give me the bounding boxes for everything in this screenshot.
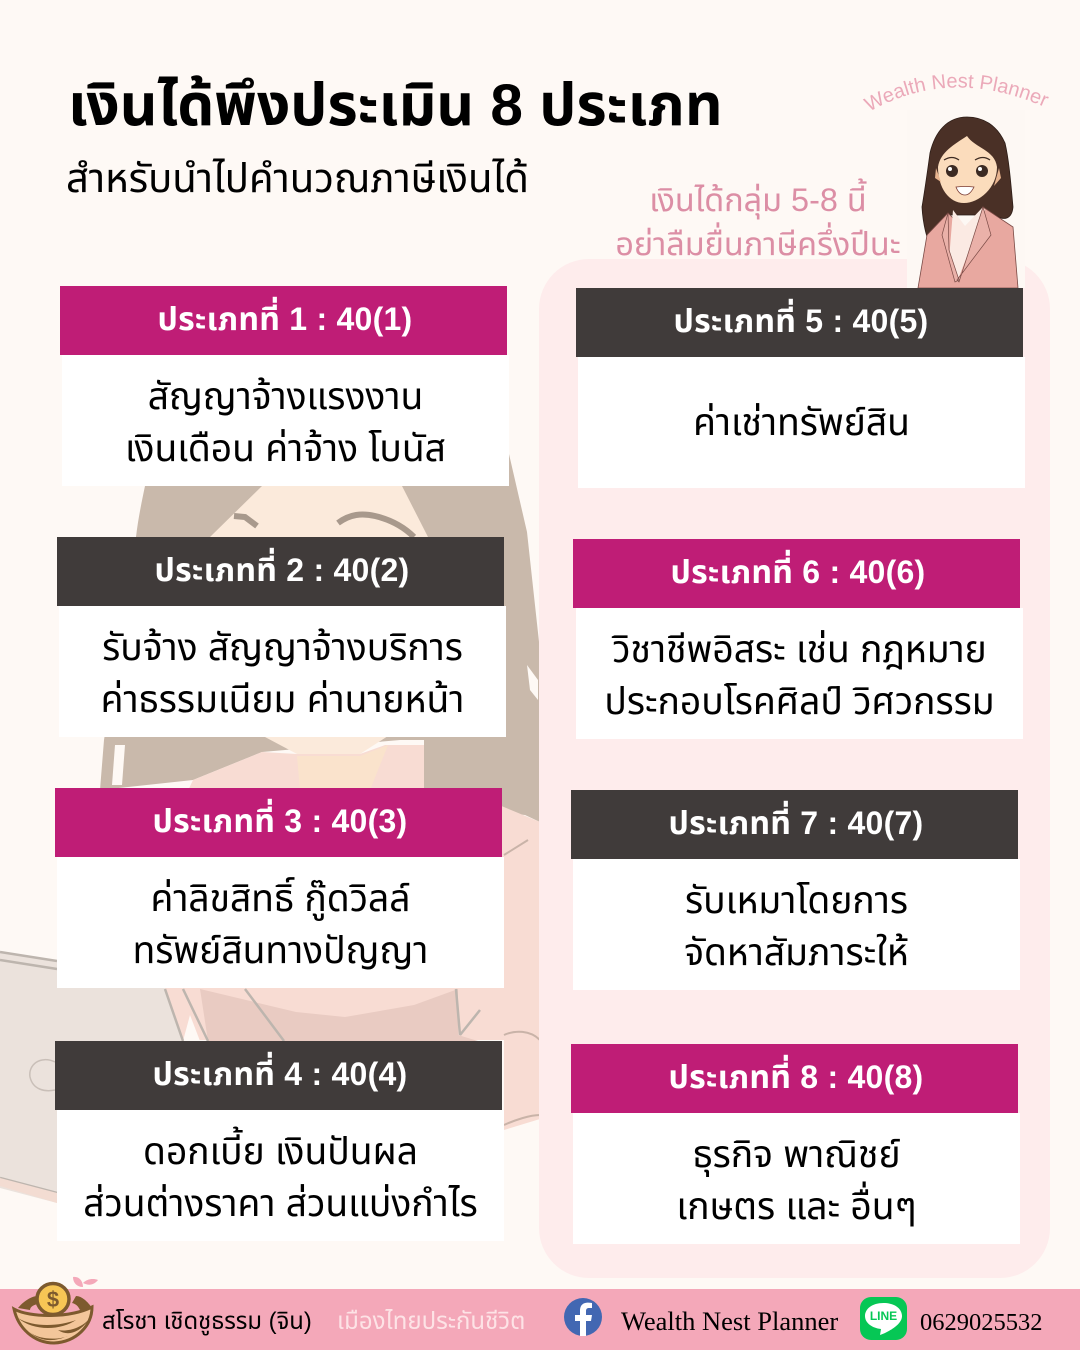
header bbox=[60, 286, 507, 355]
pink reminder note: อย่าลืมยื่นภาษีครึ่งปีนะ bbox=[615, 226, 901, 262]
pink reminder note: เงินได้กลุ่ม 5-8 นี้ bbox=[649, 182, 867, 218]
description: จัดหาสัมภาระให้ bbox=[684, 931, 909, 973]
curved brand label: Wealth Nest Planner bbox=[863, 74, 1049, 110]
contact name: สโรชา เชิดชูธรรม (จิน) bbox=[102, 1308, 312, 1335]
footer bar bbox=[0, 1289, 1080, 1350]
header bbox=[571, 1044, 1018, 1113]
pink reminder note bbox=[615, 178, 901, 262]
description: ประกอบโรคศิลป์ วิศวกรรม bbox=[604, 680, 995, 722]
header bbox=[573, 539, 1020, 608]
card: type 3 bbox=[55, 788, 504, 988]
description bbox=[57, 857, 504, 988]
phone number: 0629025532 bbox=[920, 1309, 1042, 1336]
description bbox=[578, 357, 1025, 488]
description: ค่าเช่าทรัพย์สิน bbox=[693, 401, 910, 443]
description bbox=[576, 608, 1023, 739]
background watermark: large illustrated woman bbox=[0, 454, 539, 1203]
description bbox=[59, 606, 506, 737]
right rounded panel bbox=[539, 259, 1050, 1278]
description: เงินเดือน ค่าจ้าง โบนัส bbox=[125, 427, 446, 469]
description bbox=[573, 859, 1020, 990]
description: ทรัพย์สินทางปัญญา bbox=[133, 929, 428, 971]
description bbox=[62, 355, 509, 486]
description bbox=[57, 1110, 504, 1241]
company name: เมืองไทยประกันชีวิต bbox=[337, 1308, 525, 1335]
icon: LINE: LINE bbox=[870, 1309, 897, 1323]
header bbox=[571, 790, 1018, 859]
card: type 8 bbox=[571, 1044, 1020, 1244]
header bbox=[55, 788, 502, 857]
description: ส่วนต่างราคา ส่วนแบ่งกำไร bbox=[83, 1182, 478, 1224]
header: ประเภทที่ 8 : 40(8) bbox=[669, 1059, 923, 1095]
icon: nest with coin logo: $ bbox=[47, 1287, 59, 1312]
description: สัญญาจ้างแรงงาน bbox=[148, 375, 423, 417]
header: ประเภทที่ 4 : 40(4) bbox=[153, 1056, 407, 1092]
avatar: woman in pink blazer bbox=[907, 116, 1025, 288]
description: รับเหมาโดยการ bbox=[685, 879, 908, 921]
description: ค่าลิขสิทธิ์ กู๊ดวิลล์ bbox=[150, 877, 410, 919]
description bbox=[573, 1113, 1020, 1244]
header: ประเภทที่ 6 : 40(6) bbox=[671, 554, 925, 590]
header bbox=[576, 288, 1023, 357]
card: type 7 bbox=[571, 790, 1020, 990]
description: ดอกเบี้ย เงินปันผล bbox=[143, 1130, 418, 1172]
subtitle: สำหรับนำไปคำนวณภาษีเงินได้ bbox=[66, 157, 529, 201]
header: ประเภทที่ 3 : 40(3) bbox=[153, 803, 407, 839]
header: ประเภทที่ 5 : 40(5) bbox=[674, 303, 928, 339]
description: ธุรกิจ พาณิชย์ bbox=[692, 1133, 901, 1175]
description: รับจ้าง สัญญาจ้างบริการ bbox=[102, 626, 463, 668]
header: ประเภทที่ 2 : 40(2) bbox=[155, 552, 409, 588]
card: type 1 bbox=[60, 286, 509, 486]
card: type 5 bbox=[576, 288, 1025, 488]
card: type 6 bbox=[573, 539, 1023, 739]
header: ประเภทที่ 7 : 40(7) bbox=[669, 805, 923, 841]
card: type 2 bbox=[57, 537, 506, 737]
description: วิชาชีพอิสระ เช่น กฎหมาย bbox=[612, 628, 987, 670]
description: เกษตร และ อื่นๆ bbox=[676, 1185, 917, 1227]
header bbox=[57, 537, 504, 606]
title: เงินได้พึงประเมิน 8 ประเภท bbox=[68, 73, 722, 138]
card: type 4 bbox=[55, 1041, 504, 1241]
header bbox=[55, 1041, 502, 1110]
description: ค่าธรรมเนียม ค่านายหน้า bbox=[101, 678, 464, 720]
icon: LINE bbox=[860, 1297, 907, 1340]
header: ประเภทที่ 1 : 40(1) bbox=[158, 301, 412, 337]
icon: nest with coin logo bbox=[12, 1276, 98, 1344]
facebook page name: Wealth Nest Planner bbox=[621, 1306, 838, 1336]
icon: facebook bbox=[564, 1298, 602, 1336]
